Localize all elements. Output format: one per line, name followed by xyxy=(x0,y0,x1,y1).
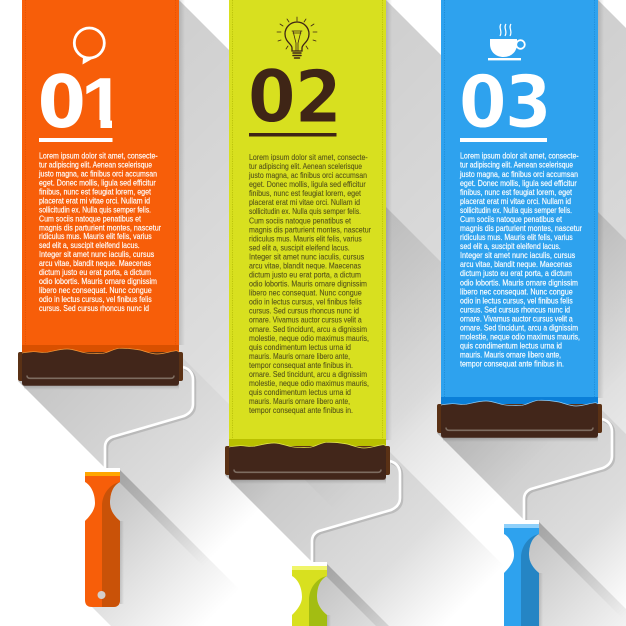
text block 01: sed elit a, suscipit eleifend lacus. xyxy=(39,241,140,250)
text block 02: arcu vitae, blandit neque. Maecenas xyxy=(249,262,361,270)
long shadow: orange strip xyxy=(179,0,626,626)
number 01 xyxy=(38,60,126,144)
text block 01: Integer sit amet nunc iaculis, cursus xyxy=(39,250,154,259)
text block 03: odio lobortis. Mauris ornare dignissim xyxy=(460,278,578,287)
text block 03: placerat erat mi vitae orci. Nullam id xyxy=(460,197,571,206)
text block 02: placerat erat mi vitae orci. Nullam id xyxy=(249,198,360,207)
text block 02: justo magna, ac finibus orci accumsan xyxy=(248,171,367,180)
long shadow: blue strip xyxy=(598,0,626,434)
green strip xyxy=(229,0,392,445)
paint roller: blue xyxy=(437,397,614,626)
paint roller: green xyxy=(225,439,402,626)
text block 03: ornare. Vivamus auctor cursus velit a xyxy=(460,314,573,323)
text block 01: odio in lectus cursus, vel finibus felis xyxy=(39,295,152,304)
text block 03: Lorem ipsum dolor sit amet, consecte- xyxy=(460,152,579,161)
text block 03: eget. Donec mollis, ligula sed efficitur xyxy=(460,179,577,188)
text block 03: arcu vitae, blandit neque. Maecenas xyxy=(460,260,572,269)
number 02: 2 xyxy=(295,55,342,139)
text block 01: sollicitudin ex. Nulla quis semper felis. xyxy=(39,205,151,214)
text block 02: tempor consequat ante finibus in. xyxy=(249,361,353,370)
text block 03: mauris. Mauris ornare libero ante, xyxy=(460,351,561,360)
panel: orange column 01 xyxy=(18,0,194,607)
text block 02: finibus, nunc est feugiat lorem, eget xyxy=(249,189,362,198)
panel: green column 02 xyxy=(225,0,402,626)
text block 01: magnis dis parturient montes, nascetur xyxy=(39,223,161,232)
text block 02: sollicitudin ex. Nulla quis semper felis. xyxy=(249,207,361,216)
text block 02: ornare. Sed tincidunt, arcu a dignissim xyxy=(249,325,367,334)
panel: blue column 03 xyxy=(437,0,614,626)
text block 02: molestie, neque odio maximus mauris, xyxy=(249,379,369,388)
orange strip xyxy=(22,0,185,350)
text block 03: magnis dis parturient montes, nascetur xyxy=(460,224,582,233)
text block 01: finibus, nunc est feugiat lorem, eget xyxy=(39,188,152,196)
text block 03: sollicitudin ex. Nulla quis semper felis. xyxy=(460,206,572,215)
text block 02: molestie, neque odio maximus mauris, xyxy=(249,334,369,343)
underline 03 xyxy=(460,138,547,142)
text block 02: magnis dis parturient montes, nascetur xyxy=(249,225,371,234)
text block 03: ridiculus mus. Mauris elit felis, varius xyxy=(460,233,573,242)
text block 01: tur adipiscing elit. Aenean scelerisque xyxy=(39,161,152,170)
text block 02: mauris. Mauris ornare libero ante, xyxy=(249,352,350,361)
text block 02: odio lobortis. Mauris ornare dignissim xyxy=(249,280,367,289)
text block 02: mauris. Mauris ornare libero ante, xyxy=(249,397,350,406)
text block 03: justo magna, ac finibus orci accumsan xyxy=(459,170,578,179)
number 01: 1 xyxy=(81,64,125,144)
text block 02: libero nec consequat. Nunc congue xyxy=(249,289,362,298)
text block 02: quis condimentum lectus urna id xyxy=(249,343,351,352)
text block 02: ornare. Sed tincidunt, arcu a dignissim xyxy=(249,370,367,379)
text block 02: dictum justo eu erat porta, a dictum xyxy=(249,270,361,280)
text block 02: ornare. Vivamus auctor cursus velit a xyxy=(249,316,362,325)
text block 02 xyxy=(248,153,371,415)
underline 02 xyxy=(249,133,336,136)
text block 03: odio in lectus cursus, vel finibus felis xyxy=(460,296,573,305)
number 01: 0 xyxy=(38,60,86,144)
icon: coffee cup xyxy=(488,24,525,60)
text block 03: libero nec consequat. Nunc congue xyxy=(460,287,573,296)
text block 02: Cum sociis natoque penatibus et xyxy=(249,216,352,225)
number 03: 3 xyxy=(505,60,552,144)
blue strip xyxy=(441,0,604,403)
text block 01: Cum sociis natoque penatibus et xyxy=(39,214,142,223)
text block 01: eget. Donec mollis, ligula sed efficitur xyxy=(39,178,156,188)
text block 03: ornare. Sed tincidunt, arcu a dignissim xyxy=(460,324,578,332)
long shadow: blue roller xyxy=(437,410,626,622)
long shadow: green handle xyxy=(309,564,389,626)
long shadow: orange roller xyxy=(18,358,451,626)
text block 02: quis condimentum lectus urna id xyxy=(249,388,351,397)
text block 01: Lorem ipsum dolor sit amet, consecte- xyxy=(39,152,158,161)
number 03 xyxy=(459,60,552,144)
text block 02: ridiculus mus. Mauris elit felis, varius xyxy=(249,234,362,243)
number 03: 0 xyxy=(459,60,507,144)
paint roller: orange xyxy=(18,345,194,607)
text block 03: Cum sociis natoque penatibus et xyxy=(460,215,563,224)
text block 03: sed elit a, suscipit eleifend lacus. xyxy=(460,242,561,251)
text block 02: tur adipiscing elit. Aenean scelerisque xyxy=(249,162,362,171)
text block 03: cursus. Sed cursus rhoncus nunc id xyxy=(460,305,570,314)
text block 01: dictum justo eu erat porta, a dictum xyxy=(39,268,151,277)
text block 01: arcu vitae, blandit neque. Maecenas xyxy=(39,259,151,268)
text block 01: justo magna, ac finibus orci accumsan xyxy=(38,170,157,179)
text block 02: cursus. Sed cursus rhoncus nunc id xyxy=(249,307,359,316)
text block 03 xyxy=(459,152,582,369)
text block 02: odio in lectus cursus, vel finibus felis xyxy=(249,298,362,307)
icon: speech bubble xyxy=(74,28,104,64)
long shadow: orange handle xyxy=(85,470,276,626)
text block 02: Lorem ipsum dolor sit amet, consecte- xyxy=(249,153,368,162)
underline 01 xyxy=(39,138,112,142)
text block 03: tempor consequat ante finibus in. xyxy=(460,360,564,369)
text block 03: Integer sit amet nunc iaculis, cursus xyxy=(460,251,575,260)
text block 02: sed elit a, suscipit eleifend lacus. xyxy=(249,243,350,252)
text block 01: cursus. Sed cursus rhoncus nunc id xyxy=(39,304,149,313)
text block 01: odio lobortis. Mauris ornare dignissim xyxy=(39,277,157,286)
number 02 xyxy=(248,54,342,139)
long shadow: blue handle xyxy=(521,522,626,626)
text block 01 xyxy=(38,152,161,313)
text block 03: tur adipiscing elit. Aenean scelerisque xyxy=(460,161,573,170)
text block 01: libero nec consequat. Nunc congue xyxy=(39,286,152,295)
text block 02: tempor consequat ante finibus in. xyxy=(249,406,353,415)
text block 02: eget. Donec mollis, ligula sed efficitur xyxy=(249,180,366,189)
long shadow: green roller xyxy=(225,452,564,626)
text block 03: finibus, nunc est feugiat lorem, eget xyxy=(460,188,573,197)
icon: light bulb xyxy=(277,17,317,58)
text block 02: Integer sit amet nunc iaculis, cursus xyxy=(249,252,364,261)
number 02: 0 xyxy=(248,54,296,138)
text block 01: placerat erat mi vitae orci. Nullam id xyxy=(39,196,150,205)
text block 03: molestie, neque odio maximus mauris, xyxy=(460,332,580,342)
text block 01: ridiculus mus. Mauris elit felis, varius xyxy=(39,232,152,241)
text block 03: dictum justo eu erat porta, a dictum xyxy=(460,269,572,278)
long shadow: green strip xyxy=(386,0,626,626)
text block 03: quis condimentum lectus urna id xyxy=(460,342,562,350)
